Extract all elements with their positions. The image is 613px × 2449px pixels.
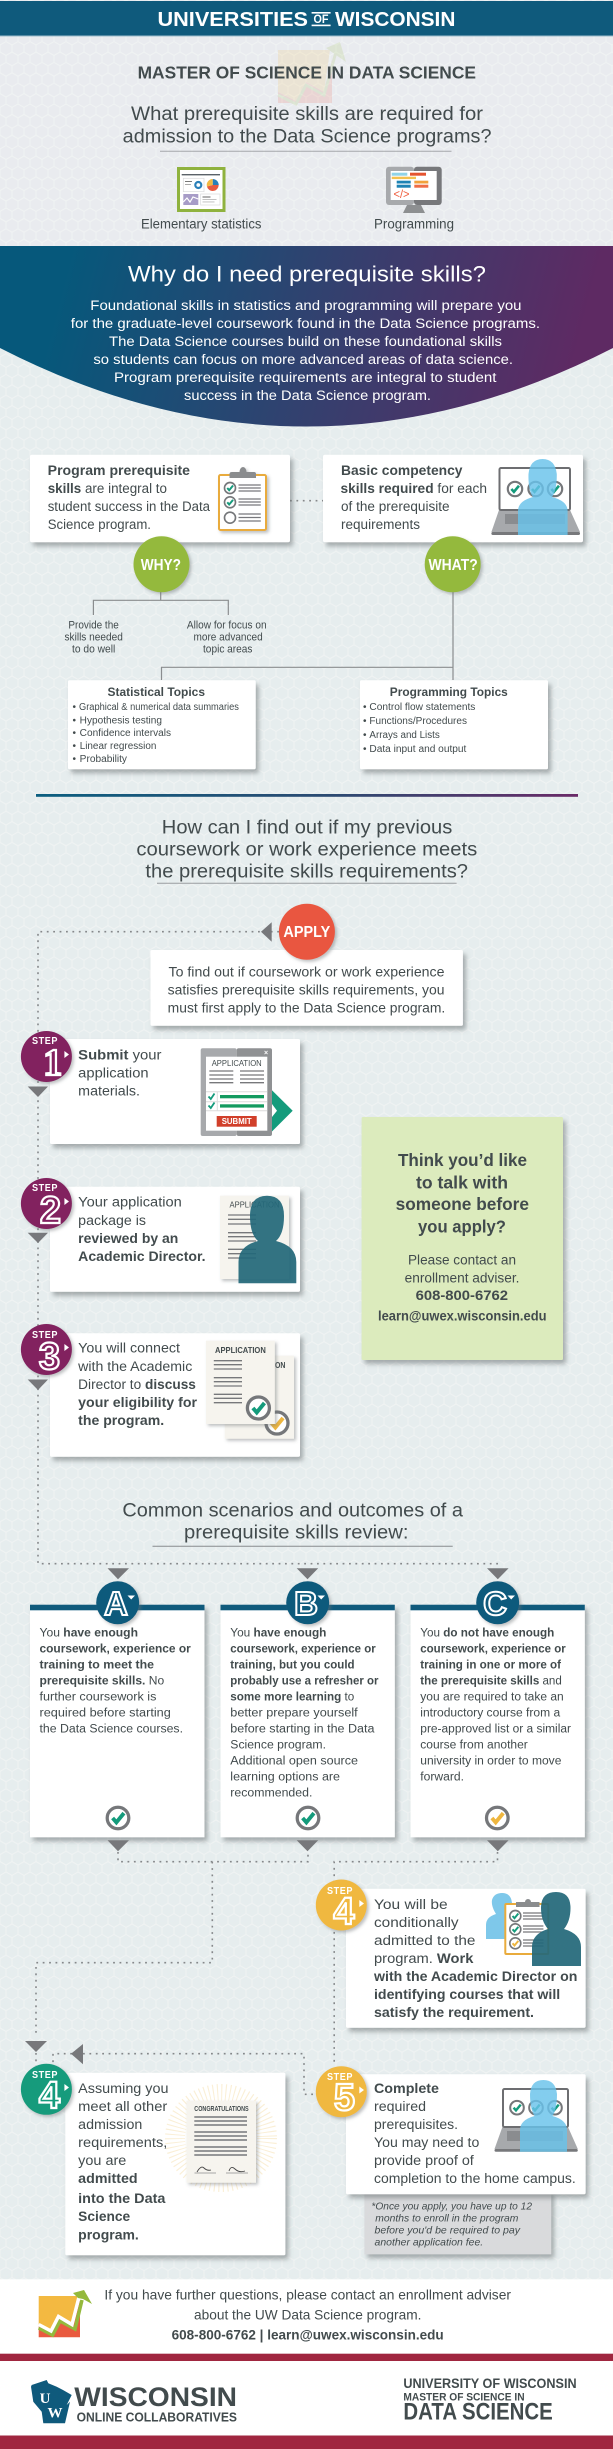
programming topics list: •	[363, 702, 367, 713]
text: reviewed: package is	[78, 1213, 146, 1228]
icon: statistics dashboard	[178, 168, 224, 210]
banner body text: for the graduate-level coursework found in the Data Science programs.	[71, 316, 540, 331]
tree: why branches	[93, 590, 228, 615]
scenario A text	[40, 1628, 191, 1736]
step 1 badge: 1	[43, 1042, 62, 1084]
panel: statistical topics	[68, 680, 256, 769]
callout contact details: 608-800-6762	[416, 1288, 508, 1303]
header wordmark: UNIVERSITIES	[158, 9, 308, 31]
dotted flow: step 5 to step 4	[53, 2054, 313, 2094]
programming topics list: Data input and output	[369, 744, 467, 755]
text: complete prerequisites: required	[374, 2099, 426, 2114]
icon: laptop with person	[491, 459, 580, 535]
text: conditionally admitted	[373, 1897, 577, 2020]
programming topics list	[363, 702, 475, 755]
step 2 badge: 2	[40, 1190, 61, 1232]
step 2 badge: STEP	[32, 1183, 58, 1194]
programming topics list: Functions/Procedures	[369, 716, 467, 727]
text: basic competency skills: skills required for each	[340, 481, 487, 496]
arrow: step 2 down	[28, 1233, 48, 1243]
scenario C text: course from another	[420, 1740, 528, 1752]
statistical topics list: Graphical & numerical data summaries	[79, 702, 239, 713]
text: admitted	[78, 2081, 168, 2242]
badge: what	[425, 536, 481, 592]
scenario A text: training to meet the	[40, 1660, 154, 1672]
callout contact details	[378, 1252, 546, 1323]
icon: application pages	[206, 1341, 294, 1439]
header wordmark: WISCONSIN	[335, 9, 455, 31]
tree: what branches	[162, 590, 453, 680]
conditional step 4 badge: 4	[333, 1891, 355, 1933]
program title: MASTER OF SCIENCE IN DATA SCIENCE	[138, 62, 476, 82]
icon: congratulations certificate	[175, 2094, 267, 2183]
text: discuss eligibility: Director to discuss	[78, 1377, 196, 1392]
callout contact details: learn@uwex.wisconsin.edu	[378, 1308, 546, 1323]
logo: Wisconsin Online Collaboratives: W	[48, 2405, 62, 2421]
footer contact band	[0, 2279, 613, 2353]
scenario B text	[230, 1628, 379, 1800]
heading: how can I find out	[136, 817, 477, 883]
callout heading: to talk with	[416, 1172, 508, 1192]
text: complete prerequisites: You may need to	[374, 2135, 479, 2150]
icon: programming monitor	[386, 167, 442, 213]
footer contact text: 608-800-6762 | learn@uwex.wisconsin.edu	[172, 2326, 444, 2342]
panel: apply text: To find out if coursework or work experience	[168, 965, 444, 980]
footnote: another application fee.	[374, 2236, 483, 2248]
scenario C text: coursework, experience or	[420, 1644, 566, 1656]
label: programming: Programming	[374, 216, 454, 231]
text: complete prerequisites: completion to the home campus.	[374, 2171, 576, 2186]
panel: scenario B: B	[294, 1585, 318, 1622]
text: submit: materials.	[78, 1084, 140, 1099]
callout heading	[396, 1150, 529, 1236]
header wordmark	[158, 9, 455, 31]
header bar	[0, 1, 613, 36]
scenario A text: prerequisite skills. No	[40, 1676, 164, 1688]
text: program prerequisite skills: Science program.	[48, 517, 151, 532]
logo: Wisconsin Online Collaboratives: ONLINE COLLABORATIVES	[77, 2410, 237, 2424]
conditional step 4 badge: STEP	[327, 1886, 353, 1897]
badge: why	[134, 536, 190, 592]
badge: what: WHAT?	[428, 557, 478, 574]
icon: check A	[107, 1807, 129, 1829]
text: basic competency skills	[340, 463, 487, 532]
text: complete prerequisites	[374, 2081, 576, 2186]
banner body text	[71, 298, 540, 403]
footnote	[364, 2190, 551, 2254]
programming topics list: •	[363, 716, 367, 727]
panel: basic competency skills	[323, 455, 583, 542]
text: reviewed: Academic Director.	[78, 1249, 206, 1264]
heading: how can I find out: the prerequisite skills requirements?	[145, 861, 468, 882]
text: admitted: Science	[78, 2209, 131, 2224]
scenario C text: forward.	[420, 1772, 464, 1784]
programming topics title: Programming Topics	[390, 685, 508, 699]
text: allow for focus	[187, 619, 267, 655]
icon: application form: APPLICATION	[212, 1058, 262, 1068]
text: basic competency skills: Basic competency	[341, 463, 463, 478]
icon: check B	[297, 1807, 319, 1829]
dotted flow: scenarios A and B to step 4	[36, 1852, 308, 2066]
banner body text: Program prerequisite requirements are integral to student	[114, 370, 497, 385]
arrow: down to step 4	[25, 2041, 47, 2052]
step 2 badge	[21, 1178, 72, 1232]
text: complete prerequisites: Complete	[374, 2081, 440, 2096]
heading: how can I find out: coursework or work experience meets	[136, 840, 477, 861]
scenario B text: probably use a refresher or	[230, 1676, 379, 1688]
icon: application form: SUBMIT	[222, 1117, 252, 1126]
scenario C text: the prerequisite skills and	[420, 1676, 562, 1688]
admitted step 4 badge	[21, 2064, 72, 2117]
text: conditionally admitted: You will be	[374, 1897, 448, 1912]
statistical topics list: Confidence intervals	[80, 728, 171, 739]
statistical topics list: Probability	[80, 754, 127, 765]
panel: scenario A: A	[104, 1585, 128, 1622]
statistical topics title: Statistical Topics	[108, 685, 205, 699]
panel: step 2	[50, 1187, 300, 1292]
callout heading: Think you’d like	[398, 1150, 527, 1170]
scenario A text: the Data Science courses.	[40, 1724, 183, 1736]
banner body text: Foundational skills in statistics and programming will prepare you	[90, 298, 522, 313]
label: elementary statistics: Elementary statistics	[141, 216, 262, 231]
callout: talk with someone	[362, 1117, 563, 1360]
scenario C text: You do not have enough	[420, 1628, 554, 1640]
step 1 badge	[21, 1031, 72, 1084]
panel: scenario C	[410, 1581, 585, 1837]
icon: application form	[201, 1048, 293, 1136]
icon: application with reviewer: APPLICATION	[230, 1200, 280, 1210]
icon: check C	[486, 1807, 508, 1829]
scenario A text: required before starting	[40, 1708, 171, 1720]
text: program prerequisite skills: Program prerequisite	[48, 463, 191, 478]
footnote: months to enroll in the program	[375, 2212, 519, 2224]
statistical topics list: Linear regression	[80, 741, 156, 752]
scenario B text: Additional open source	[230, 1756, 358, 1768]
icon: clipboard	[219, 467, 266, 530]
scenario B text: training, but you could	[230, 1660, 355, 1672]
callout heading: someone before	[396, 1194, 529, 1214]
scenario B text: recommended.	[230, 1788, 312, 1800]
scenario B text: You have enough	[230, 1628, 326, 1640]
text: provide the skills: Provide the	[68, 619, 119, 631]
arrow: step 3 down	[28, 1380, 48, 1390]
programming topics list: •	[363, 730, 367, 741]
step 5 badge	[316, 2066, 367, 2119]
badge: apply	[279, 904, 335, 960]
text: discuss eligibility	[77, 1341, 198, 1428]
arrow: from scenario C	[487, 1840, 509, 1851]
text: submit: application	[78, 1066, 149, 1081]
scenario C text: you are required to take an	[420, 1692, 564, 1704]
scenario C text	[420, 1628, 571, 1784]
icon: application form: ×	[264, 1050, 268, 1057]
icon: application pages: APPLICATION	[215, 1345, 266, 1355]
arrow: to scenario C	[487, 1568, 509, 1579]
text: conditionally admitted: satisfy the requirement.	[374, 2005, 534, 2020]
text: allow for focus: topic areas	[203, 643, 253, 655]
text: discuss eligibility: your eligibility for	[78, 1395, 198, 1410]
text: reviewed	[78, 1195, 206, 1264]
text: conditionally admitted: conditionally	[374, 1915, 459, 1930]
text: program prerequisite skills: student success in the Data	[48, 499, 210, 514]
text: admitted: Assuming you	[78, 2081, 168, 2096]
text: conditionally admitted: admitted to the	[374, 1933, 475, 1948]
text: complete prerequisites: prerequisites.	[374, 2117, 458, 2132]
text: discuss eligibility: the program.	[78, 1413, 164, 1428]
statistical topics list: •	[72, 728, 76, 739]
programming topics list: Control flow statements	[369, 702, 475, 713]
scenario B text: coursework, experience or	[230, 1644, 376, 1656]
scenario A text: coursework, experience or	[40, 1644, 191, 1656]
text: admitted: into the Data	[78, 2191, 166, 2206]
panel: apply text	[150, 950, 463, 1026]
logo: UW Master of Science in Data Science: UNIVERSITY OF WISCONSIN	[403, 2376, 577, 2391]
text: program prerequisite skills	[48, 463, 210, 532]
banner heading: Why do I need prerequisite skills?	[128, 262, 486, 287]
statistical topics list	[72, 702, 239, 765]
dotted flow: scenario C to steps 4 and 5	[334, 1852, 498, 2066]
panel: scenario B	[220, 1581, 395, 1837]
banner body text: so students can focus on more advanced areas of data science.	[93, 352, 513, 367]
logo: Wisconsin Online Collaboratives	[31, 2380, 237, 2424]
text: admitted: admitted	[78, 2171, 138, 2186]
panel: why prerequisite skills banner	[0, 246, 613, 426]
callout heading: you apply?	[418, 1216, 506, 1236]
text: provide the skills: skills needed	[64, 631, 123, 643]
step 3 badge: 3	[39, 1336, 60, 1378]
panel: program prerequisite skills	[30, 455, 290, 542]
panel: step 1	[50, 1039, 300, 1144]
footer contact text: about the UW Data Science program.	[194, 2306, 421, 2322]
scenario C text: training in one or more of	[420, 1660, 561, 1672]
scenario A text: You have enough	[40, 1628, 138, 1640]
panel: apply text: satisfies prerequisite skills requirements, you	[168, 983, 444, 998]
heading: common scenarios: prerequisite skills review:	[184, 1522, 408, 1543]
logo: UW Master of Science in Data Science	[403, 2376, 577, 2425]
step 5 badge: STEP	[327, 2072, 353, 2083]
header wordmark: OF	[314, 14, 328, 26]
text: conditionally admitted: with the Academic Director on	[373, 1969, 577, 1984]
text: admitted: admission	[78, 2117, 142, 2132]
logo: Wisconsin Online Collaboratives: U	[40, 2391, 51, 2407]
text: reviewed: Your application	[78, 1195, 182, 1210]
icon: congratulations certificate: CONGRATULATIONS	[194, 2106, 249, 2113]
statistical topics list: •	[72, 741, 76, 752]
text: complete prerequisites: provide proof of	[374, 2153, 474, 2168]
step 3 badge	[21, 1324, 72, 1378]
question heading: What prerequisite skills are required for	[131, 104, 484, 125]
panel: admitted step 4	[65, 2073, 285, 2255]
arrow: apply left	[261, 922, 272, 942]
watermark logo	[278, 42, 346, 104]
badge: apply: APPLY	[283, 924, 331, 941]
text: basic competency skills: of the prerequisite	[341, 499, 450, 514]
statistical topics list: •	[72, 715, 76, 726]
statistical topics list: Hypothesis testing	[80, 715, 162, 726]
text: submit	[78, 1047, 162, 1099]
icon: growth chart logo	[39, 2290, 92, 2337]
callout contact details: Please contact an	[408, 1252, 516, 1267]
conditional step 4 badge	[316, 1880, 367, 1933]
text: allow for focus: more advanced	[194, 631, 263, 643]
text: submit: Submit your	[78, 1047, 162, 1062]
text: admitted: requirements,	[78, 2135, 167, 2150]
logo: UW Master of Science in Data Science: MASTER OF SCIENCE IN	[403, 2392, 525, 2404]
text: admitted: program.	[78, 2227, 139, 2242]
text: admitted: you are	[78, 2153, 126, 2168]
banner body text: success in the Data Science program.	[184, 388, 431, 403]
text: allow for focus: Allow for focus on	[187, 619, 267, 631]
scenario B text: some more learning to	[230, 1692, 354, 1704]
arrow: to scenario B	[297, 1568, 318, 1579]
text: reviewed: reviewed by an	[78, 1231, 178, 1246]
programming topics list: •	[363, 744, 367, 755]
text: provide the skills	[64, 619, 123, 655]
scenario C text: pre-approved list or a similar	[420, 1724, 571, 1736]
panel: scenario C: C	[483, 1585, 507, 1622]
programming topics list: Arrays and Lists	[369, 730, 440, 741]
statistical topics list: •	[72, 702, 76, 713]
dotted flow: apply to scenarios	[38, 932, 498, 1564]
scenario B text: learning options are	[230, 1772, 340, 1784]
text: discuss eligibility: You will connect	[78, 1341, 180, 1356]
arrow: to scenario A	[108, 1568, 129, 1579]
footnote: *Once you apply, you have up to 12	[371, 2200, 532, 2212]
callout contact details: enrollment adviser.	[405, 1270, 520, 1285]
question heading: admission to the Data Science programs?	[123, 126, 491, 147]
connector between cards	[290, 500, 323, 502]
panel: step 5	[346, 2074, 586, 2194]
text: basic competency skills: requirements	[341, 517, 420, 532]
icon: application pages: ON	[275, 1361, 286, 1370]
admitted step 4 badge: 4	[39, 2075, 60, 2117]
step 3 badge: STEP	[32, 1330, 58, 1341]
footer logo band	[0, 2353, 613, 2449]
footer contact text	[104, 2286, 511, 2342]
panel: conditional step 4	[346, 1889, 586, 2028]
scenario B text: Science program.	[230, 1740, 326, 1752]
icon: people with clipboard	[486, 1892, 581, 1966]
step 1 badge: STEP	[32, 1036, 58, 1047]
text: conditionally admitted: program. Work	[374, 1951, 474, 1966]
scenario A text: further coursework is	[40, 1692, 157, 1704]
statistical topics list: •	[72, 754, 76, 765]
badge: why: WHY?	[141, 557, 181, 574]
panel: apply text: must first apply to the Data Science program.	[168, 1001, 445, 1016]
text: discuss eligibility: with the Academic	[77, 1359, 193, 1374]
text: admitted: meet all other	[78, 2099, 168, 2114]
question heading	[123, 104, 491, 151]
icon: laptop with person	[494, 2080, 578, 2152]
section divider	[36, 794, 578, 797]
text: conditionally admitted: identifying courses that will	[374, 1987, 560, 2002]
panel: programming topics	[360, 680, 548, 769]
footer contact text: If you have further questions, please contact an enrollment adviser	[104, 2286, 511, 2302]
panel: scenario A	[30, 1581, 204, 1837]
arrow: from scenario B	[297, 1840, 318, 1851]
icon: programming monitor: </>	[394, 187, 410, 201]
logo: Wisconsin Online Collaboratives: WISCONSIN	[74, 2382, 237, 2412]
arrow: left to step 4	[71, 2044, 83, 2064]
step 5 badge: 5	[334, 2077, 355, 2119]
heading: common scenarios	[122, 1501, 463, 1546]
admitted step 4 badge: STEP	[32, 2070, 58, 2081]
logo: UW Master of Science in Data Science: DATA SCIENCE	[403, 2398, 553, 2425]
arrow: from scenario A	[108, 1840, 129, 1851]
icon: application with reviewer	[220, 1196, 296, 1283]
scenario B text: better prepare yourself	[230, 1708, 359, 1720]
text: program prerequisite skills: skills are integral to	[48, 481, 167, 496]
footnote: before you'd be required to pay	[374, 2224, 521, 2236]
scenario C text: introductory course from a	[420, 1708, 561, 1720]
scenario B text: before starting in the Data	[230, 1724, 375, 1736]
heading: how can I find out: How can I find out if my previous	[162, 817, 452, 838]
text: provide the skills: to do well	[72, 643, 115, 655]
heading: common scenarios: Common scenarios and outcomes of a	[122, 1501, 463, 1522]
scenario C text: university in order to move	[420, 1756, 561, 1768]
banner body text: The Data Science courses build on these foundational skills	[109, 334, 502, 349]
panel: step 3	[50, 1333, 300, 1457]
arrow: step 1 down	[28, 1086, 48, 1097]
